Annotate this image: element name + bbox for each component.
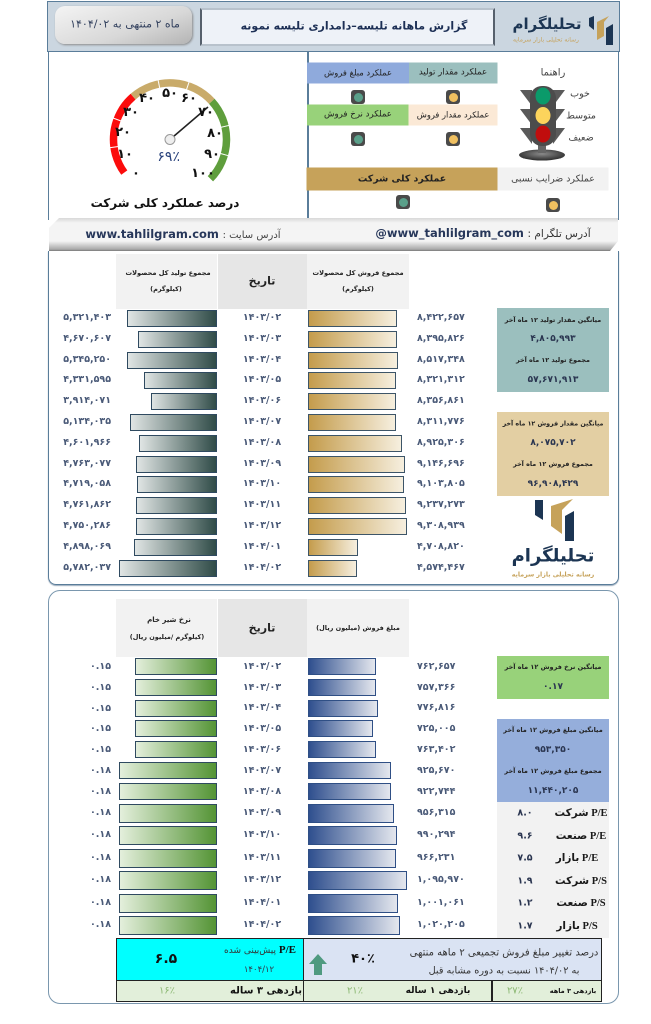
callout: rate average: ۰.۱۷	[543, 682, 563, 692]
return: 3 months: ۲۷٪	[507, 986, 523, 996]
rate values: ۰.۱۸	[90, 897, 111, 908]
date column	[243, 312, 282, 573]
gauge chart	[110, 79, 230, 182]
production values: ۴,۷۱۹,۰۵۸	[63, 478, 111, 489]
sales quantity values	[417, 312, 465, 573]
date column: ۱۴۰۳/۰۸	[243, 786, 281, 797]
sales amount values: ۹۶۶,۲۳۱	[417, 852, 455, 863]
rate values: ۰.۱۸	[90, 919, 111, 930]
gauge chart: ۱۰	[117, 147, 133, 162]
date column: ۱۴۰۳/۱۰	[243, 829, 281, 840]
status light: sales rate	[351, 132, 365, 146]
divider	[307, 52, 308, 218]
callout: sales amount averages: ۹۵۳,۳۵۰	[535, 745, 571, 755]
date text: ماه ۲ منتهی به ۱۴۰۴/۰۲	[70, 18, 180, 30]
sales amount values: ۷۵۷,۳۶۶	[417, 682, 455, 693]
rate values	[90, 661, 111, 930]
date column: ۱۴۰۳/۰۷	[243, 416, 281, 427]
header: milk rate: نرخ شیر خام	[147, 616, 191, 624]
label: production performance: عملکرد مقدار تولید	[419, 68, 487, 78]
sales quantity values: ۸,۳۱۱,۷۷۶	[417, 416, 465, 427]
date column: ۱۴۰۳/۱۰	[243, 478, 281, 489]
sales amount values: ۱,۰۲۰,۲۰۵	[417, 919, 465, 930]
status light: sales amount	[351, 90, 365, 104]
sales quantity values: ۸,۴۲۲,۶۵۷	[417, 312, 465, 323]
return: 3 years: بازدهی ۳ ساله	[230, 986, 302, 996]
header: total production: مجموع تولید کل محصولات	[125, 269, 211, 277]
date column: ۱۴۰۴/۰۲	[243, 919, 281, 930]
header logo icon	[589, 16, 613, 45]
table: valuation ratios: ۹.۶	[517, 830, 533, 842]
callout: sales amount averages: میانگین مبلغ فروش ۱۲ ماه آخر	[503, 726, 603, 734]
table: valuation ratios: ۱.۲	[517, 898, 533, 908]
production values: ۴,۷۵۰,۲۸۶	[63, 520, 111, 531]
production values: ۴,۶۰۱,۹۶۶	[63, 437, 111, 448]
gauge chart: ۹۰	[204, 147, 220, 162]
header: total production	[116, 254, 217, 309]
sales amount values	[417, 661, 465, 930]
date column: ۱۴۰۳/۱۱	[243, 499, 281, 510]
date column: ۱۴۰۳/۰۳	[243, 333, 281, 344]
sales amount values: ۷۲۵,۰۰۵	[417, 723, 455, 734]
sales quantity values: ۹,۱۴۶,۶۹۶	[417, 458, 465, 469]
date column: ۱۴۰۳/۰۴	[243, 702, 281, 713]
header: total sales	[307, 254, 409, 309]
table: valuation ratios: P/S شرکت	[555, 876, 607, 887]
bar chart: milk rate	[119, 658, 217, 935]
date column: ۱۴۰۳/۰۵	[243, 723, 281, 734]
status light: production	[446, 90, 460, 104]
gauge chart: ۶۹٪	[157, 149, 180, 165]
date column: ۱۴۰۳/۰۹	[243, 458, 281, 469]
date column: ۱۴۰۳/۰۲	[243, 312, 281, 323]
rate values: ۰.۱۸	[90, 829, 111, 840]
date column	[243, 661, 282, 930]
rate values: ۰.۱۵	[90, 744, 111, 755]
callout: production averages: میانگین مقدار تولید ۱۲ ماه آخر	[505, 316, 601, 324]
label: sales rate performance	[307, 104, 409, 126]
rate values: ۰.۱۸	[90, 765, 111, 776]
rate values: ۰.۱۸	[90, 807, 111, 818]
callout: sales quantity averages: ۹۶,۹۰۸,۴۲۹	[528, 479, 578, 489]
header band	[47, 1, 620, 52]
rate values: ۰.۱۵	[90, 723, 111, 734]
production values: ۴,۷۶۱,۸۶۲	[63, 499, 111, 510]
address bar	[49, 218, 618, 251]
date column: ۱۴۰۳/۰۹	[243, 807, 281, 818]
return: 1 year: ۲۱٪	[347, 986, 363, 996]
sales quantity values: ۴,۷۰۸,۸۲۰	[417, 541, 465, 552]
forecast P/E box: ۶.۵	[155, 951, 177, 967]
header logo tagline: رسانه تحلیلی بازار سرمایه	[513, 36, 579, 44]
logo wordmark: تحلیلگرام	[512, 546, 594, 566]
header logo wordmark: تحلیلگرام	[512, 15, 582, 33]
date column: ۱۴۰۴/۰۱	[243, 541, 281, 552]
rate values: ۰.۱۵	[90, 703, 111, 714]
date column: ۱۴۰۳/۰۷	[243, 765, 281, 776]
panel: production and sales quantity	[48, 251, 619, 585]
rate values: ۰.۱۵	[90, 661, 111, 672]
bar chart: sales quantity	[308, 310, 407, 577]
header: date: تاریخ	[249, 274, 275, 288]
date column: ۱۴۰۳/۰۶	[243, 395, 281, 406]
sales quantity values: ۸,۵۱۷,۳۴۸	[417, 354, 465, 365]
sales quantity values: ۹,۲۳۷,۲۷۳	[417, 499, 465, 510]
table: valuation ratios: P/E شرکت	[554, 808, 608, 819]
sales amount values: ۹۲۵,۶۷۰	[417, 765, 455, 776]
legend: medium: متوسط	[566, 110, 596, 122]
callout: sales amount averages	[497, 719, 609, 802]
sales quantity values: ۸,۳۹۵,۸۲۶	[417, 333, 465, 344]
callout: sales quantity averages: میانگین مقدار فروش ۱۲ ماه آخر	[503, 420, 603, 428]
date column: ۱۴۰۳/۰۶	[243, 744, 281, 755]
gauge chart: ۶۰	[181, 91, 197, 106]
label: sales amount performance	[307, 62, 409, 84]
callout: production averages	[497, 308, 609, 392]
rate values: ۰.۱۸	[90, 786, 111, 797]
header: sales amount: مبلغ فروش (میلیون ریال)	[316, 624, 400, 632]
gauge chart: ۲۰	[115, 125, 131, 140]
production values: ۳,۹۱۴,۰۷۱	[63, 395, 111, 406]
date column: ۱۴۰۳/۱۲	[243, 520, 281, 531]
return: 3 years	[116, 980, 304, 1002]
sales quantity values: ۸,۳۲۱,۳۱۲	[417, 374, 465, 385]
gauge chart: ۵۰	[162, 86, 178, 101]
gauge chart: ۱۰۰	[191, 166, 215, 181]
table: valuation ratios: P/S صنعت	[556, 898, 606, 909]
return: 3 months: بازدهی ۳ ماهه	[550, 987, 596, 995]
date column: ۱۴۰۴/۰۱	[243, 897, 281, 908]
label: ratios performance	[498, 168, 608, 190]
callout: production averages: مجموع تولید ۱۲ ماه آخر	[516, 356, 590, 364]
label: sales quantity performance	[408, 104, 498, 126]
header: date	[218, 254, 307, 309]
gauge title: درصد عملکرد کلی شرکت	[91, 196, 239, 210]
date column: ۱۴۰۳/۱۱	[243, 852, 281, 863]
telegram address: آدرس تلگرام : @www_tahlilgram_com	[375, 226, 591, 240]
sales change box	[304, 938, 602, 981]
production values: ۴,۶۷۰,۶۰۷	[63, 333, 111, 344]
production values: ۴,۷۶۳,۰۷۷	[63, 458, 111, 469]
gauge chart: ۷۰	[198, 105, 214, 120]
header: total sales: مجموع فروش کل محصولات	[312, 269, 404, 277]
bar chart: sales amount	[308, 658, 407, 935]
forecast P/E box	[116, 938, 304, 981]
sales quantity values: ۹,۳۰۸,۹۳۹	[417, 520, 465, 531]
bar chart: production	[119, 310, 217, 577]
legend: weak: ضعیف	[568, 132, 594, 144]
date column: ۱۴۰۳/۱۲	[243, 874, 281, 885]
callout: sales amount averages: ۱۱,۴۴۰,۲۰۵	[528, 786, 578, 796]
label: overall company performance: عملکرد کلی شرکت	[358, 174, 446, 184]
production values: ۵,۱۳۴,۰۳۵	[63, 416, 111, 427]
callout: production averages: ۴,۸۰۵,۹۹۳	[530, 334, 576, 344]
return: 3 months	[492, 980, 602, 1002]
date column: ۱۴۰۳/۰۸	[243, 437, 281, 448]
header: milk rate: (کیلوگرم /میلیون ریال)	[130, 633, 204, 641]
production values	[63, 312, 111, 573]
gauge chart: ۴۰	[139, 91, 155, 106]
date button	[55, 6, 192, 44]
sales quantity values: ۴,۵۷۴,۴۶۷	[417, 562, 465, 573]
logo tagline: رسانه تحلیلی بازار سرمایه	[512, 572, 594, 578]
gauge chart: ۸۰	[207, 126, 223, 141]
status light: ratios	[546, 198, 560, 212]
label: sales rate performance: عملکرد نرخ فروش	[324, 110, 392, 120]
title box	[200, 8, 495, 46]
report title: گزارش ماهانه تلیسه–دامداری تلیسه نمونه	[241, 20, 467, 32]
gauge chart: ۳۰	[123, 105, 139, 120]
callout: sales quantity averages: مجموع فروش ۱۲ ماه آخر	[513, 460, 593, 468]
callout: production averages: ۵۷,۶۷۱,۹۱۳	[528, 375, 578, 385]
sales amount values: ۷۶۳,۴۰۲	[417, 744, 455, 755]
date column: ۱۴۰۳/۰۳	[243, 682, 281, 693]
callout: sales quantity averages: ۸,۰۷۵,۷۰۲	[530, 438, 576, 448]
table: valuation ratios: ۱.۷	[517, 920, 533, 932]
gauge chart: ۰	[132, 166, 140, 181]
header: sales amount	[307, 599, 409, 657]
production values: ۵,۷۸۲,۰۳۷	[63, 562, 111, 573]
rate values: ۰.۱۵	[90, 682, 111, 693]
header: date	[218, 599, 307, 657]
table: valuation ratios: P/S بازار	[556, 921, 598, 932]
sales amount values: ۱,۰۰۱,۰۶۱	[417, 897, 465, 908]
sales change box: درصد تغییر مبلغ فروش تجمیعی ۲ ماهه منتهی	[410, 948, 598, 958]
website address: آدرس سایت : www.tahlilgram.com	[85, 227, 281, 241]
table: valuation ratios: ۷.۵	[517, 852, 533, 864]
header: total production: (کیلوگرم)	[150, 285, 182, 293]
sales amount values: ۷۷۶,۸۱۶	[417, 702, 455, 713]
sales amount values: ۱,۰۹۵,۹۷۰	[417, 874, 465, 885]
callout: sales amount averages: مجموع مبلغ فروش ۱۲ ماه آخر	[504, 767, 602, 775]
table: valuation ratios: ۱.۹	[517, 876, 533, 886]
return: 1 year	[304, 980, 492, 1002]
logo icon	[535, 499, 574, 541]
production values: ۴,۳۳۱,۵۹۵	[63, 374, 111, 385]
table: valuation ratios: P/E بازار	[556, 853, 598, 864]
rate values: ۰.۱۸	[90, 852, 111, 863]
sales amount values: ۹۲۲,۷۴۴	[417, 786, 455, 797]
icon: traffic light	[519, 86, 565, 160]
sales quantity values: ۹,۱۰۳,۸۰۵	[417, 478, 465, 489]
sales amount values: ۹۵۶,۳۱۵	[417, 807, 455, 818]
production values: ۵,۳۲۱,۴۰۳	[63, 312, 111, 323]
legend title: راهنما	[541, 68, 565, 78]
return: 1 year: بازدهی ۱ ساله	[406, 986, 470, 996]
callout: rate average: میانگین نرخ فروش ۱۲ ماه آخر	[505, 663, 601, 671]
rate values: ۰.۱۸	[90, 874, 111, 885]
label: production performance	[408, 62, 498, 84]
date column: ۱۴۰۳/۰۲	[243, 661, 281, 672]
header: milk rate	[116, 599, 217, 657]
forecast P/E box: ۱۴۰۴/۱۲	[244, 965, 274, 975]
legend: good: خوب	[570, 88, 590, 100]
sales quantity values: ۸,۹۲۵,۳۰۶	[417, 437, 465, 448]
callout: rate average	[497, 656, 609, 699]
sales quantity values: ۸,۳۵۶,۸۶۱	[417, 395, 465, 406]
date column: ۱۴۰۳/۰۴	[243, 354, 281, 365]
sales change box: ۴۰٪	[351, 952, 375, 966]
sales change box: به ۱۴۰۴/۰۲ نسبت به دوره مشابه قبل	[429, 966, 579, 976]
status light: overall	[396, 195, 410, 209]
production values: ۴,۸۹۸,۰۶۹	[63, 541, 111, 552]
return: 3 years: ۱۶٪	[159, 986, 175, 996]
panel: summary	[48, 52, 619, 220]
production values: ۵,۳۴۵,۲۵۰	[63, 354, 111, 365]
header: date: تاریخ	[249, 622, 275, 634]
label: sales quantity performance: عملکرد مقدار فروش	[417, 110, 489, 120]
table: valuation ratios: P/E صنعت	[556, 831, 606, 842]
panel: sales amount and rate	[48, 590, 619, 1004]
sales amount values: ۹۹۰,۲۹۴	[417, 829, 455, 840]
label: sales amount performance: عملکرد مبلغ فروش	[324, 68, 392, 78]
callout: sales quantity averages	[497, 412, 609, 496]
table: valuation ratios: ۸.۰	[517, 808, 533, 818]
label: ratios performance: عملکرد ضرایب نسبی	[511, 174, 595, 184]
status light: sales quantity	[446, 132, 460, 146]
sales amount values: ۷۶۲,۶۵۷	[417, 661, 455, 672]
table: valuation ratios	[497, 802, 609, 938]
forecast P/E box: P/E پیش‌بینی شده	[224, 944, 296, 956]
date column: ۱۴۰۳/۰۵	[243, 374, 281, 385]
label: overall company performance	[306, 168, 498, 190]
date column: ۱۴۰۴/۰۲	[243, 562, 281, 573]
header: total sales: (کیلوگرم)	[342, 285, 374, 293]
